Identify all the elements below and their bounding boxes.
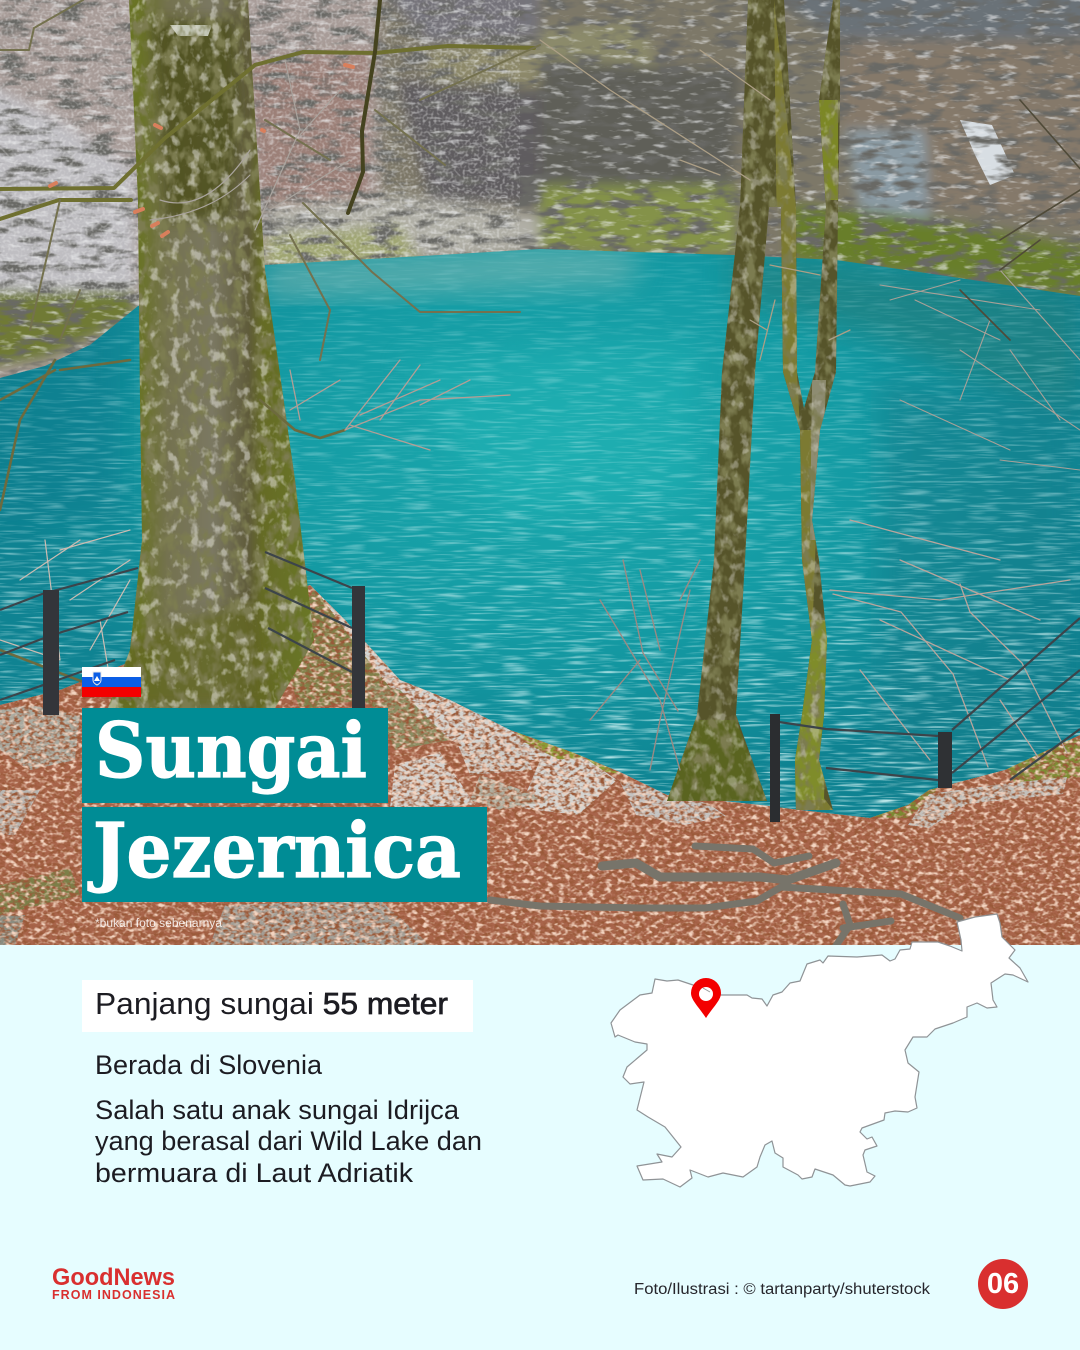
icon: red location pin [691,978,721,1018]
text block: description: bermuara di Laut Adriatik [95,1158,414,1188]
logo: GoodNews from Indonesia: GoodNews [52,1264,175,1291]
photo: turquoise lake surrounded by trees [0,0,1080,956]
title: Sungai Jezernica [82,706,487,902]
tree: large mossy trunk [100,0,325,710]
ground: leaf litter and rocks [0,560,1080,956]
fence posts and wires [0,552,1080,822]
icon: Slovenian flag [82,667,141,697]
title line two: Jezernica [87,806,461,895]
title line one: Sungai [95,706,367,795]
map: Slovenia outline [611,914,1028,1187]
text block: description: Salah satu anak sungai Idrijca [95,1095,460,1125]
page number badge [978,1259,1028,1309]
text block: location: Berada di Slovenia [95,1050,323,1080]
text block: river length [82,980,473,1032]
caption: photo disclaimer: *bukan foto sebenarnya [95,918,223,930]
logo: GoodNews from Indonesia: FROM INDONESIA [52,1288,175,1302]
trees: thin trunks on the right [660,0,840,815]
page number badge: 06 [987,1268,1019,1300]
text block: description [95,1095,482,1188]
logo: GoodNews from Indonesia [52,1264,175,1302]
roots on the forest floor [490,846,960,956]
branches [0,0,1080,770]
credit line: Foto/Ilustrasi : © tartanparty/shuterstock [634,1281,930,1298]
water [0,230,1080,830]
cliff and far shore [0,0,1080,400]
text block: description: yang berasal dari Wild Lake dan [95,1126,482,1156]
text block: river length: Panjang sungai 55 meter [95,986,448,1021]
